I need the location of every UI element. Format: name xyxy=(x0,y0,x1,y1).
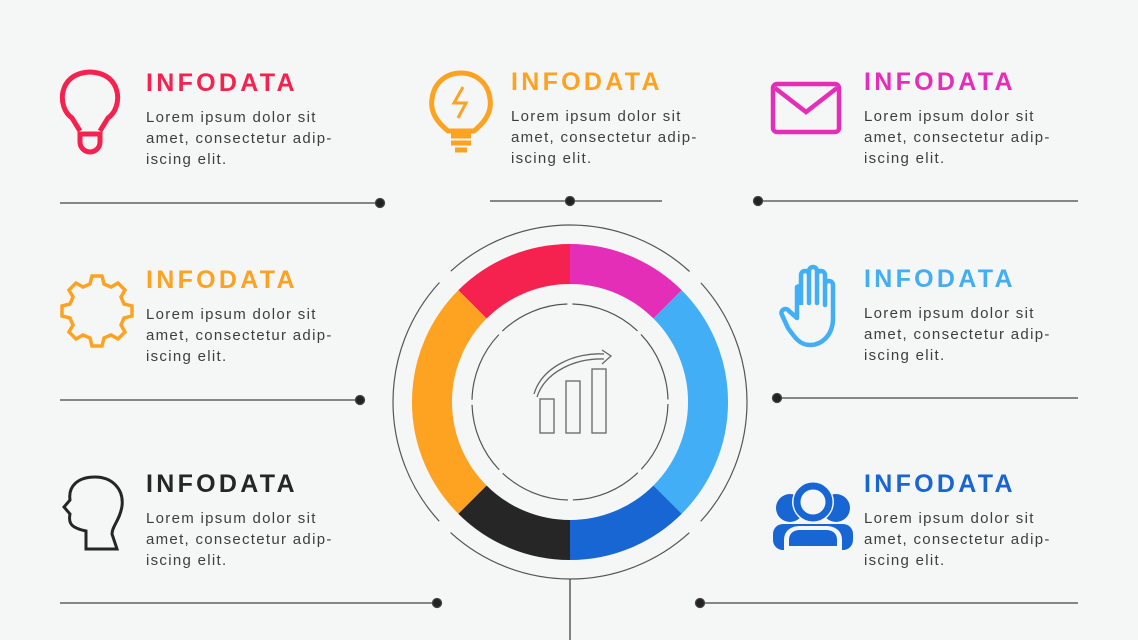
icon: envelope xyxy=(773,84,839,132)
text block: top right: Lorem ipsum dolor sit xyxy=(864,108,1035,125)
text block: middle left xyxy=(146,266,333,365)
text block: top right: INFODATA xyxy=(864,68,1016,96)
text block: bottom right xyxy=(864,470,1051,569)
text block: top right: iscing elit. xyxy=(864,150,945,167)
text block: bottom right: amet, consectetur adip- xyxy=(864,531,1051,548)
inner dashed circle xyxy=(472,304,668,500)
text block: bottom left xyxy=(146,470,333,569)
text block: bottom right: INFODATA xyxy=(864,470,1016,498)
text block: middle right: Lorem ipsum dolor sit xyxy=(864,305,1035,322)
text block: middle left: iscing elit. xyxy=(146,348,227,365)
icon: head xyxy=(64,477,122,549)
text block: middle left: amet, consectetur adip- xyxy=(146,327,333,344)
text block: top middle: INFODATA xyxy=(511,68,663,96)
text block: middle right: iscing elit. xyxy=(864,347,945,364)
text block: bottom right: Lorem ipsum dolor sit xyxy=(864,510,1035,527)
icon: gear xyxy=(62,276,132,346)
text block: middle right: INFODATA xyxy=(864,265,1016,293)
icon: growth chart xyxy=(534,350,611,433)
text block: middle right: amet, consectetur adip- xyxy=(864,326,1051,343)
text block: top middle: amet, consectetur adip- xyxy=(511,129,698,146)
icon: users xyxy=(773,481,853,550)
text block: top middle xyxy=(511,68,698,167)
text block: bottom left: INFODATA xyxy=(146,470,298,498)
divider lines with dots xyxy=(60,196,1078,640)
text block: bottom left: Lorem ipsum dolor sit xyxy=(146,510,317,527)
text block: top middle: Lorem ipsum dolor sit xyxy=(511,108,682,125)
text block: top left xyxy=(146,69,333,168)
text block: middle right xyxy=(864,265,1051,364)
text block: middle left: INFODATA xyxy=(146,266,298,294)
text block: top right xyxy=(864,68,1051,167)
text block: top right: amet, consectetur adip- xyxy=(864,129,1051,146)
icon: hand xyxy=(781,267,833,345)
outer thin circle xyxy=(393,225,747,579)
text block: bottom right: iscing elit. xyxy=(864,552,945,569)
icon: bulb xyxy=(62,72,118,152)
ring chart xyxy=(393,225,747,579)
text block: top left: INFODATA xyxy=(146,69,298,97)
text block: top middle: iscing elit. xyxy=(511,150,592,167)
text block: top left: Lorem ipsum dolor sit xyxy=(146,109,317,126)
text block: bottom left: amet, consectetur adip- xyxy=(146,531,333,548)
text block: middle left: Lorem ipsum dolor sit xyxy=(146,306,317,323)
text block: top left: iscing elit. xyxy=(146,151,227,168)
icon: bolt bulb xyxy=(432,73,490,150)
text block: bottom left: iscing elit. xyxy=(146,552,227,569)
text block: top left: amet, consectetur adip- xyxy=(146,130,333,147)
